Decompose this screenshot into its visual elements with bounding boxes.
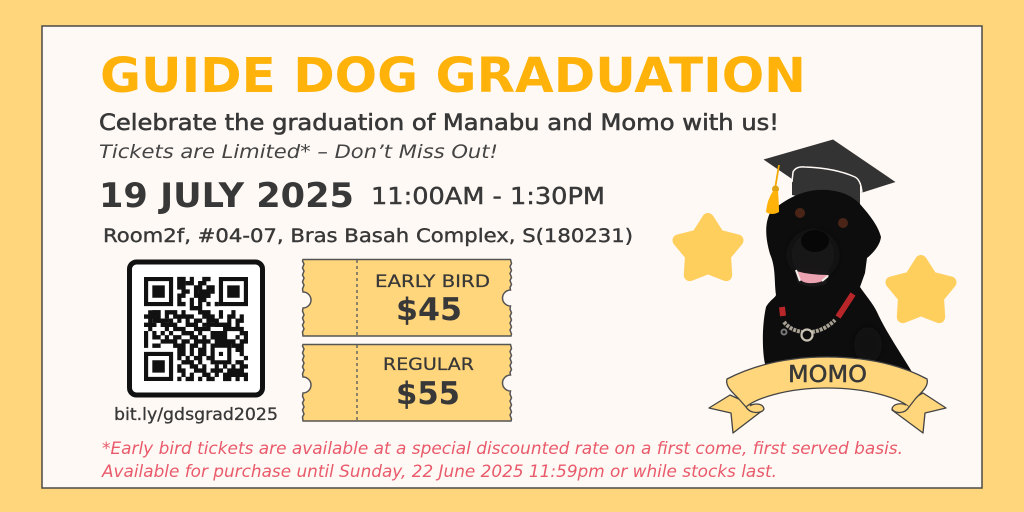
QR modules xyxy=(144,277,248,381)
dog nose xyxy=(801,230,829,252)
regular label: REGULAR xyxy=(383,355,474,375)
dog silhouette xyxy=(763,190,912,372)
dog eyes xyxy=(795,208,848,228)
ribbon banner xyxy=(727,357,927,407)
icon: right star xyxy=(892,261,950,317)
ribbon folds xyxy=(746,404,909,413)
dog fur shading xyxy=(789,231,882,363)
ticket: regular xyxy=(302,344,512,421)
early bird label: EARLY BIRD xyxy=(375,272,490,292)
ticket: early bird xyxy=(302,260,512,336)
ribbon name: MOMO xyxy=(788,362,867,388)
title: GUIDE DOG GRADUATION xyxy=(100,48,806,104)
footnote: Available for purchase until Sunday, 22 June 2025 11:59pm or while stocks last. xyxy=(101,462,777,481)
dog collar xyxy=(782,294,853,340)
QR link: bit.ly/gdsgrad2025 xyxy=(114,405,278,424)
cap tassel xyxy=(766,165,779,214)
footnote: *Early bird tickets are available at a special discounted rate on a first come, first served basis. xyxy=(102,439,903,458)
ribbon tails xyxy=(709,393,946,433)
subtitle: Celebrate the graduation of Manabu and Momo with us! xyxy=(99,110,779,136)
event time: 11:00AM - 1:30PM xyxy=(371,182,605,210)
QR code block xyxy=(130,262,262,395)
footnote xyxy=(101,439,903,481)
icon: left star xyxy=(678,219,738,275)
event date: 19 JULY 2025 xyxy=(99,176,354,216)
venue address: Room2f, #04-07, Bras Basah Complex, S(180231) xyxy=(103,225,633,247)
Momo the dog with cap xyxy=(763,140,912,372)
dog mouth xyxy=(795,265,829,287)
regular price: $55 xyxy=(396,376,460,412)
graduation cap xyxy=(764,140,896,210)
name ribbon xyxy=(709,357,946,433)
early bird price: $45 xyxy=(396,292,462,328)
ticket limit note: Tickets are Limited* – Don’t Miss Out! xyxy=(99,141,498,163)
